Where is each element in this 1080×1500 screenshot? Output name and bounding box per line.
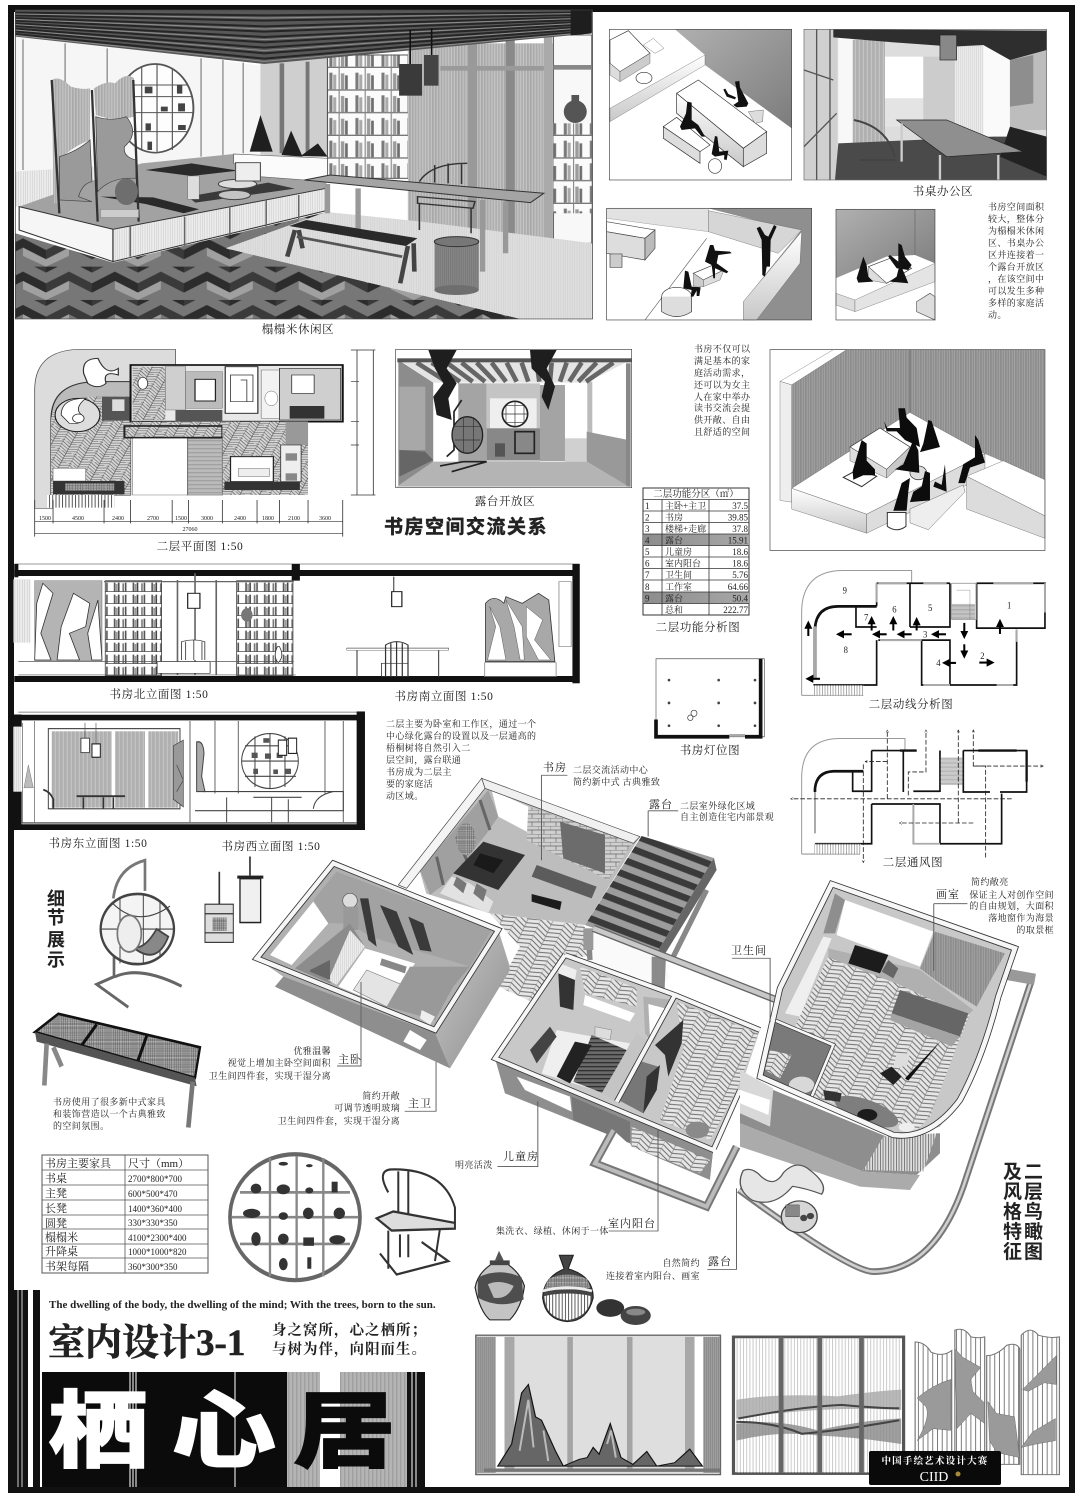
table: floor function areas: 64.66 bbox=[728, 582, 748, 592]
text: study description: 个露台开放区 bbox=[988, 261, 1044, 272]
vertical heading: aerial and style: 图 bbox=[1024, 1241, 1043, 1263]
desk bbox=[304, 175, 544, 272]
ceiling bbox=[15, 10, 592, 64]
table: study furniture: 长凳 bbox=[45, 1202, 67, 1215]
vertical heading: aerial and style: 层 bbox=[1024, 1182, 1043, 1203]
text: study function: 供开敞、自由 bbox=[694, 414, 750, 425]
table: floor function areas: 楼梯+走廊 bbox=[665, 523, 706, 534]
text: study function bbox=[694, 343, 751, 437]
caption: circulation: 二层动线分析图 bbox=[869, 697, 953, 711]
panel: desk office iso views bbox=[607, 29, 1047, 320]
table: study furniture: 书桌 bbox=[45, 1171, 67, 1185]
studio exterior wall bbox=[740, 1070, 940, 1190]
panel: terrace perspective bbox=[396, 349, 632, 488]
outer curved terrace rail bbox=[739, 974, 1035, 1272]
text: study description: 可以发生多种 bbox=[988, 285, 1044, 296]
balcony box bbox=[595, 1130, 737, 1207]
light layout bbox=[656, 659, 764, 737]
plan dimensions: 2400 bbox=[234, 516, 246, 522]
table: floor function areas: 5 bbox=[645, 547, 650, 557]
hanging chair bbox=[97, 860, 182, 1007]
intro text bbox=[386, 718, 536, 801]
text: study description: 书房空间面积 bbox=[988, 201, 1045, 212]
name banner bbox=[42, 1372, 425, 1487]
captions: east and west elevations: 书房东立面图 1:50 bbox=[49, 836, 147, 850]
text: furniture note: 和装饰营造以一个古典雅致 bbox=[53, 1108, 166, 1119]
table: floor function areas: 主卧+主卫 bbox=[665, 500, 706, 511]
plan dimensions: 1500 bbox=[39, 516, 51, 522]
labels: aerial annotations: 简约敞亮 bbox=[971, 876, 1009, 887]
pendant lamps bbox=[399, 28, 439, 96]
labels: aerial annotations: 优雅温馨 bbox=[293, 1045, 331, 1056]
labels: aerial annotations: 自然简约 bbox=[662, 1257, 700, 1268]
plan dimensions: 1800 bbox=[262, 516, 274, 522]
text: study function: 书房不仅可以 bbox=[694, 343, 751, 354]
labels: aerial annotations: 集洗衣、绿植、休闲于一体 bbox=[496, 1225, 609, 1236]
ink mountains bbox=[250, 115, 327, 157]
plan dimensions: 2700 bbox=[147, 516, 159, 522]
table: floor function areas: 书房 bbox=[665, 512, 683, 522]
caption: ventilation: 二层通风图 bbox=[883, 856, 943, 869]
text: study description: 动。 bbox=[988, 309, 1007, 320]
pergola slats bbox=[397, 358, 632, 383]
circulation diagram: 2 bbox=[980, 651, 985, 661]
labels: aerial annotations: 露台 bbox=[649, 798, 673, 811]
table: study furniture: 4100*2300*400 bbox=[128, 1233, 187, 1243]
labels: aerial annotations bbox=[209, 760, 1055, 1281]
competition badge: 中国手绘艺术设计大赛 bbox=[881, 1455, 989, 1467]
vertical heading: aerial and style: 格 bbox=[1003, 1201, 1022, 1223]
table: study furniture: 1400*360*400 bbox=[128, 1204, 182, 1214]
table: floor function areas: 7 bbox=[645, 570, 650, 580]
table: floor function areas bbox=[643, 488, 749, 615]
labels: aerial annotations: 连接着室内阳台、画室 bbox=[606, 1270, 700, 1281]
slatted bench bbox=[35, 1014, 200, 1128]
plan dimensions: 2100 bbox=[288, 516, 300, 522]
long bench bbox=[287, 220, 417, 283]
iso view C bbox=[607, 208, 812, 320]
captions: north and south elevations bbox=[110, 687, 493, 703]
table: study furniture: 330*330*350 bbox=[128, 1218, 178, 1228]
circulation diagram: 5 bbox=[928, 603, 933, 613]
text: study description: 较大，整体分 bbox=[988, 213, 1044, 225]
plan dimensions: 3000 bbox=[201, 516, 213, 522]
table: floor function areas: 18.6 bbox=[732, 547, 748, 557]
ventilation diagram bbox=[791, 730, 1043, 863]
caption: floor plan: 二层平面图 1:50 bbox=[157, 540, 243, 553]
caption: tatami lounge: 榻榻米休闲区 bbox=[262, 322, 334, 336]
vertical heading: aerial and style: 鸟 bbox=[1024, 1201, 1043, 1223]
text: study description bbox=[988, 201, 1045, 320]
table: study furniture: 2700*800*700 bbox=[128, 1174, 182, 1184]
plan dimensions: 1500 bbox=[175, 516, 187, 522]
labels: aerial annotations: 简约新中式 古典雅致 bbox=[573, 776, 660, 787]
table: floor function areas: 工作室 bbox=[665, 581, 692, 592]
project name: 心 bbox=[172, 1364, 276, 1484]
labels: aerial annotations: 视觉上增加主卧空间面积 bbox=[228, 1057, 332, 1068]
text: study description: 区并连接着一 bbox=[988, 249, 1044, 260]
text: study description: 区、书桌办公 bbox=[988, 237, 1044, 248]
table: study furniture: 600*500*470 bbox=[128, 1189, 178, 1199]
table: floor function areas: 39.85 bbox=[728, 512, 748, 522]
table: study furniture: 1000*1000*820 bbox=[128, 1247, 187, 1257]
side stripes bbox=[14, 1290, 40, 1487]
west elevation drawing bbox=[22, 721, 357, 823]
table: floor function areas: 2 bbox=[645, 512, 650, 522]
painting studio wing bbox=[740, 884, 1015, 1190]
table: study furniture: 书房主要家具 bbox=[45, 1156, 112, 1170]
floor bbox=[397, 462, 628, 487]
intro text: 中心绿化露台的设置以及一层通高的 bbox=[386, 730, 536, 741]
plan dimensions bbox=[39, 516, 331, 533]
table: floor function areas: 9 bbox=[645, 594, 650, 604]
table: floor function areas: 儿童房 bbox=[665, 546, 692, 557]
circulation diagram: 4 bbox=[936, 658, 941, 668]
back wall bbox=[433, 382, 587, 462]
circulation diagram: 1 bbox=[1007, 600, 1011, 610]
table: floor function areas: 4 bbox=[645, 536, 650, 546]
competition badge bbox=[869, 1451, 1001, 1485]
caption: desk office: 书桌办公区 bbox=[913, 184, 973, 198]
folding screen bbox=[915, 1329, 1059, 1475]
iso view A bbox=[609, 29, 792, 180]
table: study furniture: 360*300*350 bbox=[128, 1262, 178, 1272]
panel: tatami lounge perspective bbox=[15, 10, 593, 319]
connecting beam and posts bbox=[583, 928, 777, 1000]
tea table and stools bbox=[146, 163, 260, 200]
folding screen bbox=[52, 76, 139, 222]
vertical heading: aerial and style: 特 bbox=[1003, 1221, 1022, 1243]
captions: north and south elevations: 书房南立面图 1:50 bbox=[395, 689, 493, 703]
study room bbox=[398, 778, 640, 925]
text: study description: 多样的家庭活 bbox=[988, 297, 1044, 308]
corridor herringbone bbox=[490, 913, 603, 1002]
leader lines bbox=[405, 775, 967, 1269]
text: furniture note: 的空间氛围。 bbox=[53, 1120, 109, 1131]
table: floor function areas: 6 bbox=[645, 558, 650, 568]
round tea shelf bbox=[117, 64, 193, 153]
circulation diagram: 3 bbox=[923, 630, 928, 640]
mountain panel bbox=[476, 1335, 720, 1475]
text: study function: 且舒适的空间 bbox=[694, 426, 750, 437]
labels: aerial annotations: 的取景框 bbox=[1016, 924, 1054, 935]
labels: aerial annotations: 卫生间 bbox=[731, 943, 767, 957]
labels: aerial annotations: 简约开敞 bbox=[362, 1090, 400, 1101]
labels: aerial annotations: 卫生间四件套，实现干湿分离 bbox=[278, 1115, 400, 1127]
table: study furniture: 尺寸（mm） bbox=[128, 1156, 189, 1170]
plan dimensions: 3600 bbox=[319, 516, 331, 522]
studio frame bbox=[760, 884, 1015, 1136]
english tagline: The dwelling of the body, the dwelling of the mind; With the trees, born to the sun. bbox=[49, 1299, 436, 1311]
labels: aerial annotations: 主卧 bbox=[338, 1052, 362, 1066]
plan dimensions: 2400 bbox=[112, 516, 124, 522]
circulation diagram: 6 bbox=[892, 604, 897, 615]
table: floor function areas: 卫生间 bbox=[665, 569, 692, 580]
pendant lamps bbox=[205, 856, 263, 942]
text: study function: 庭活动需求， bbox=[694, 367, 750, 379]
intro text: 层空间，露台联通 bbox=[386, 754, 461, 766]
text: furniture note bbox=[53, 1096, 166, 1131]
panel: large iso with figures bbox=[770, 350, 1045, 550]
isometric aerial view bbox=[257, 775, 1035, 1272]
table: study furniture: 榻榻米 bbox=[45, 1230, 78, 1244]
heading: study interaction: 书房空间交流关系 bbox=[384, 515, 548, 538]
vertical heading: aerial and style: 风 bbox=[1003, 1181, 1022, 1203]
chinese tagline: 与树为伴，向阳而生。 bbox=[272, 1340, 427, 1358]
child room frame bbox=[495, 955, 760, 1150]
perspective view B bbox=[804, 29, 1047, 180]
bean planter and round table bbox=[740, 1165, 824, 1233]
caption: function analysis: 二层功能分析图 bbox=[656, 620, 740, 634]
vertical heading: aerial and style: 及 bbox=[1003, 1162, 1022, 1183]
north and south elevations bbox=[13, 564, 580, 683]
armchair bbox=[417, 163, 475, 233]
left wall bbox=[398, 360, 433, 487]
table: floor function areas: 15.91 bbox=[728, 536, 748, 546]
detail heading: 展 bbox=[47, 930, 65, 950]
vertical heading: aerial and style: 二 bbox=[1024, 1162, 1043, 1183]
table: floor function areas: 总和 bbox=[665, 604, 683, 615]
text: study function: 还可以为女主 bbox=[694, 379, 750, 390]
circulation diagram: 8 bbox=[844, 645, 849, 655]
table: study furniture: 升降桌 bbox=[45, 1244, 78, 1258]
labels: aerial annotations: 儿童房 bbox=[503, 1149, 539, 1163]
intro text: 动区域。 bbox=[386, 790, 424, 801]
chinese tagline bbox=[272, 1321, 427, 1358]
labels: aerial annotations: 露台 bbox=[708, 1255, 732, 1268]
table: floor function areas: 5.76 bbox=[732, 570, 748, 580]
table: floor function areas: 37.8 bbox=[732, 524, 748, 534]
table: floor function areas: 37.5 bbox=[732, 501, 748, 511]
intro text: 二层主要为卧室和工作区，通过一个 bbox=[386, 718, 536, 730]
table: floor function areas: 50.4 bbox=[732, 594, 748, 604]
table: floor function areas: 222.77 bbox=[723, 605, 748, 615]
table: floor function areas: 8 bbox=[645, 582, 650, 592]
labels: aerial annotations: 自主创造住宅内部景观 bbox=[680, 811, 774, 822]
round stool bbox=[434, 237, 479, 295]
left wall bbox=[15, 33, 268, 207]
captions: north and south elevations: 书房北立面图 1:50 bbox=[110, 687, 208, 701]
intro text: 要的家庭活 bbox=[386, 778, 433, 789]
labels: aerial annotations: 可调节透明玻璃 bbox=[334, 1102, 400, 1113]
vertical heading: aerial and style: 瞰 bbox=[1024, 1221, 1043, 1243]
text: furniture note: 书房使用了很多新中式家具 bbox=[53, 1096, 166, 1107]
plan dimensions: 27060 bbox=[182, 527, 198, 533]
intro text: 梧桐树将自然引入二 bbox=[386, 742, 471, 753]
ming chair bbox=[377, 1169, 455, 1274]
floor bbox=[15, 212, 592, 319]
labels: aerial annotations: 二层交流活动中心 bbox=[573, 764, 649, 775]
back wall bbox=[260, 57, 327, 157]
child room front wall bbox=[495, 1058, 713, 1187]
table: floor function areas: 室内阳台 bbox=[665, 558, 701, 568]
labels: aerial annotations: 落地窗作为海景 bbox=[988, 912, 1054, 923]
north elevation drawing bbox=[13, 573, 296, 676]
vertical heading: aerial and style bbox=[1003, 1162, 1043, 1263]
master bedroom bbox=[257, 863, 510, 1068]
chinese tagline: 身之窝所，心之栖所； bbox=[272, 1321, 427, 1339]
table: floor function areas: 露台 bbox=[665, 592, 683, 604]
labels: aerial annotations: 室内阳台 bbox=[608, 1216, 656, 1230]
table: study furniture: 圆凳 bbox=[45, 1217, 67, 1230]
circulation diagram bbox=[802, 570, 1045, 695]
table: floor function areas: 18.6 bbox=[732, 558, 748, 568]
project name: 栖 bbox=[49, 1365, 148, 1484]
captions: east and west elevations bbox=[49, 836, 320, 853]
right opening and wall bbox=[587, 363, 631, 487]
text: study function: 满足基本的家 bbox=[694, 355, 750, 366]
vertical heading: aerial and style: 征 bbox=[1003, 1241, 1022, 1263]
course title: 室内设计3-1 bbox=[48, 1322, 245, 1364]
iso view D bbox=[836, 209, 935, 320]
pergola bbox=[585, 836, 717, 997]
vases and artwork bbox=[475, 1251, 1059, 1475]
plan dimensions: 4500 bbox=[72, 516, 84, 522]
platform bbox=[19, 154, 327, 262]
table: floor function areas: 3 bbox=[645, 524, 650, 534]
pergola and study wing bbox=[257, 778, 717, 1068]
child room wing bbox=[495, 928, 777, 1207]
east elevation drawing bbox=[22, 721, 183, 823]
detail heading: 节 bbox=[47, 908, 65, 928]
master bedroom leader bbox=[337, 982, 361, 1066]
floor plan bbox=[35, 349, 375, 537]
caption: lights: 书房灯位图 bbox=[680, 743, 740, 757]
table: study furniture bbox=[42, 1155, 208, 1273]
detail heading: 示 bbox=[47, 950, 65, 970]
south elevation drawing bbox=[347, 577, 571, 677]
labels: aerial annotations: 的自由规划，大面积 bbox=[969, 900, 1055, 912]
intro text: 书房成为二层主 bbox=[386, 766, 452, 777]
bookshelf bbox=[327, 55, 409, 178]
project name: 居 bbox=[294, 1364, 395, 1484]
text: study description: ，在该空间中 bbox=[988, 273, 1044, 285]
table: floor function areas: 二层功能分区（㎡） bbox=[653, 488, 739, 500]
circulation diagram: 9 bbox=[843, 585, 848, 596]
right shelf and vase bbox=[553, 35, 592, 243]
detail heading: 细 bbox=[47, 889, 65, 909]
detail heading bbox=[47, 889, 65, 970]
east and west elevations bbox=[13, 711, 365, 830]
table: study furniture: 书架每隔 bbox=[45, 1259, 89, 1273]
labels: aerial annotations: 画室 bbox=[936, 887, 960, 901]
title block bbox=[14, 1290, 436, 1487]
labels: aerial annotations: 保证主人对创作空间 bbox=[969, 889, 1054, 900]
competition badge: CIID bbox=[920, 1470, 948, 1485]
text: study function: 读书交流会提 bbox=[694, 402, 750, 413]
caption: terrace: 露台开放区 bbox=[475, 494, 535, 508]
hanging chair bbox=[440, 400, 487, 472]
project name bbox=[49, 1364, 395, 1484]
labels: aerial annotations: 卫生间四件套，实现干湿分离 bbox=[209, 1070, 331, 1082]
labels: aerial annotations: 二层室外绿化区域 bbox=[680, 800, 755, 811]
curtains bbox=[408, 37, 553, 243]
labels: aerial annotations: 明亮活泼 bbox=[455, 1159, 493, 1170]
labels: aerial annotations: 主卫 bbox=[408, 1097, 432, 1110]
child room interior bbox=[495, 955, 760, 1150]
captions: east and west elevations: 书房西立面图 1:50 bbox=[222, 839, 320, 853]
table: floor function areas: 1 bbox=[645, 501, 650, 511]
vases bbox=[475, 1251, 651, 1325]
text: study description: 为榻榻米休闲 bbox=[988, 225, 1044, 236]
table: study furniture: 主凳 bbox=[45, 1187, 67, 1200]
hanging vines bbox=[428, 350, 557, 420]
ink wash slat panel bbox=[733, 1337, 904, 1474]
tea shelf round bbox=[230, 1154, 360, 1280]
table: floor function areas: 露台 bbox=[665, 534, 683, 546]
studio interior bbox=[760, 884, 1015, 1137]
detail furniture bbox=[35, 856, 455, 1280]
labels: aerial annotations: 书房 bbox=[543, 760, 567, 774]
circulation diagram: 7 bbox=[864, 612, 869, 623]
text: study function: 人在家中举办 bbox=[694, 391, 751, 402]
